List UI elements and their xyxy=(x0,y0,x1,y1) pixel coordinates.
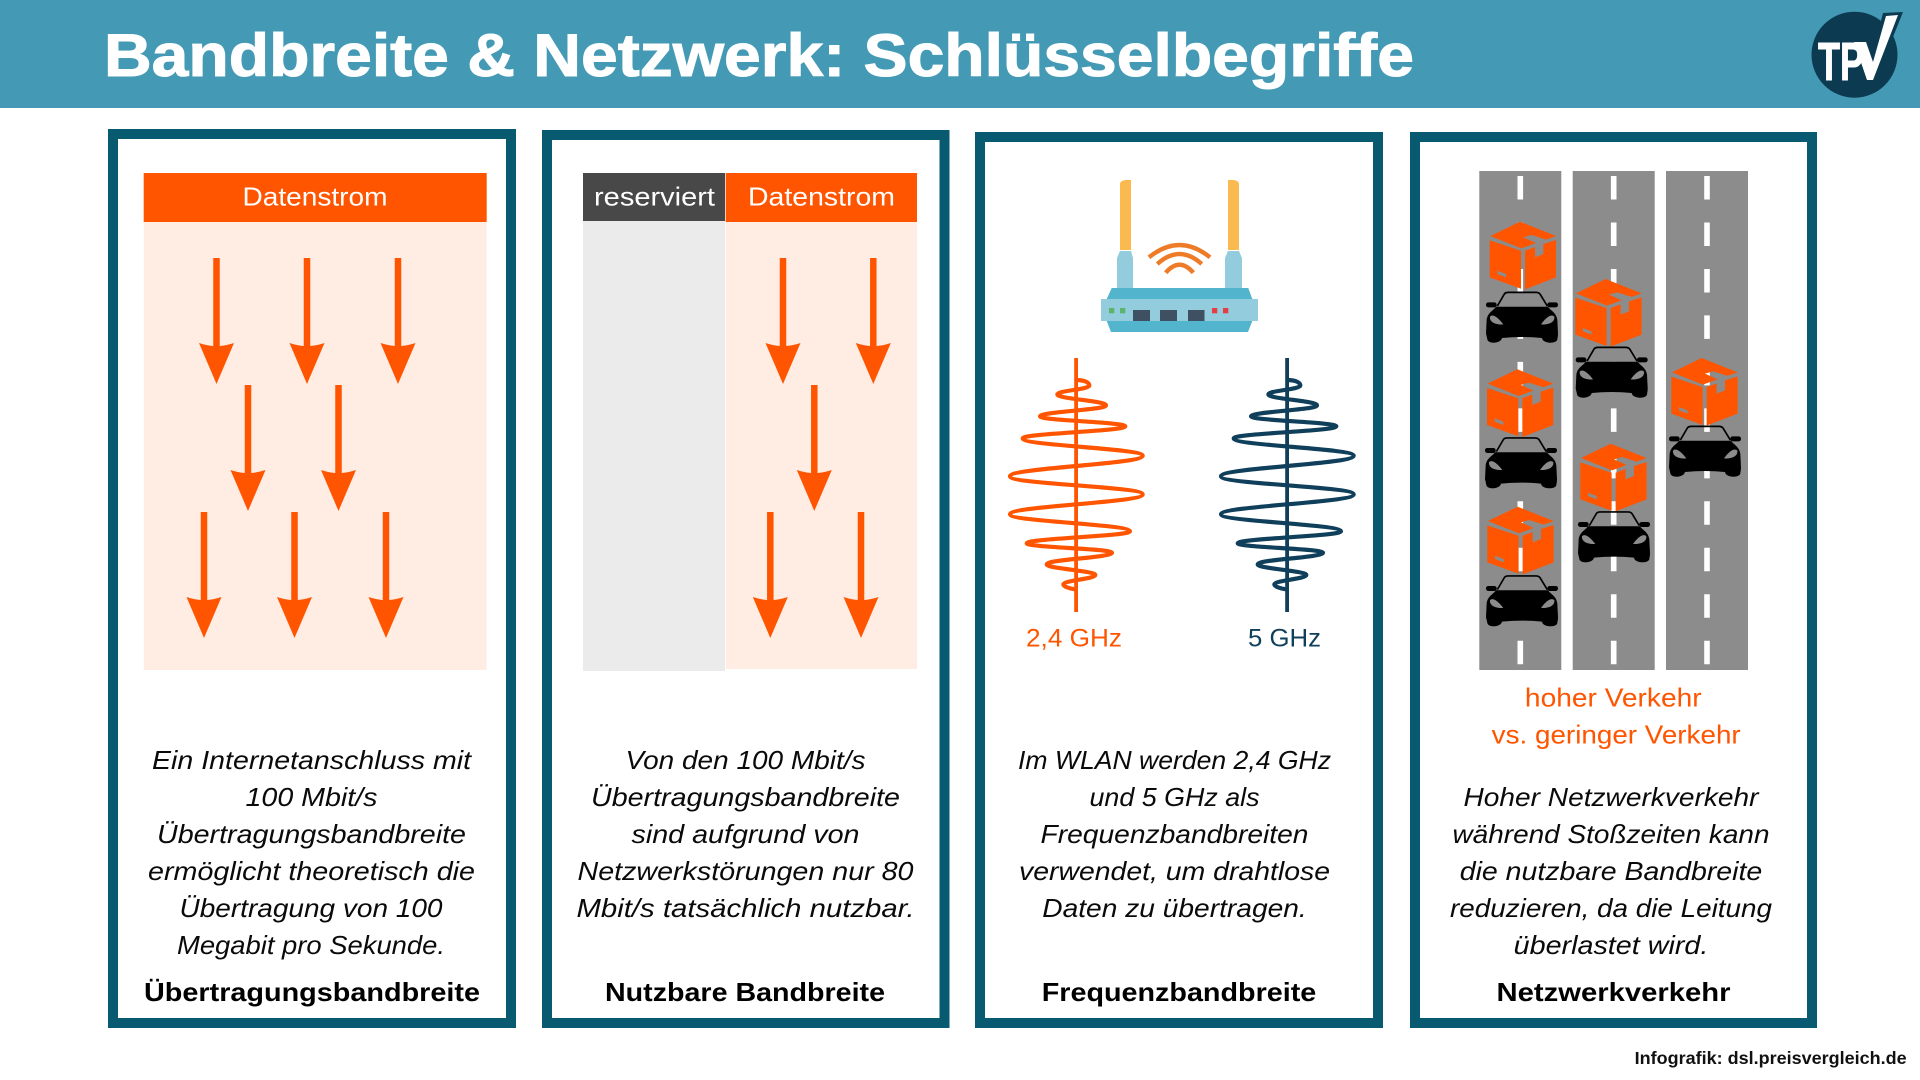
traffic caption xyxy=(1492,683,1741,749)
panel: Frequenzbandbreite xyxy=(980,137,1378,1023)
data stream area: Datenstrom xyxy=(748,182,895,212)
road 2 xyxy=(1573,171,1655,670)
description text: Übertragung von 100 xyxy=(180,893,443,923)
chart: 2,4 GHz wave xyxy=(1010,358,1143,612)
logo: TP xyxy=(1818,32,1864,92)
description text xyxy=(1450,782,1773,960)
description text: Im WLAN werden 2,4 GHz xyxy=(1018,745,1331,775)
description text: während Stoßzeiten kann xyxy=(1452,819,1770,849)
panel: Netzwerkverkehr xyxy=(1415,137,1812,1023)
label: 2,4 GHz: 2,4 GHz xyxy=(1026,625,1122,653)
traffic caption: vs. geringer Verkehr xyxy=(1492,719,1741,749)
arrows: reduced data flow xyxy=(753,258,891,638)
description text xyxy=(1018,745,1331,923)
icons: package and car, road 3 xyxy=(1669,358,1741,477)
panel heading: Übertragungsbandbreite xyxy=(144,977,480,1007)
chart: 5 GHz wave xyxy=(1221,358,1354,612)
icon: wifi router xyxy=(1101,180,1258,332)
road 1 xyxy=(1479,171,1561,670)
traffic caption: hoher Verkehr xyxy=(1525,683,1702,713)
description text: Megabit pro Sekunde. xyxy=(177,930,445,960)
description text: Ein Internetanschluss mit xyxy=(152,745,473,775)
description text: Mbit/s tatsächlich nutzbar. xyxy=(576,893,914,923)
logo xyxy=(1812,12,1903,98)
label: 5 GHz: 5 GHz xyxy=(1248,625,1321,653)
title: Bandbreite & Netzwerk: Schlüsselbegriffe xyxy=(104,22,1414,89)
description text: Hoher Netzwerkverkehr xyxy=(1464,782,1760,812)
description text: Frequenzbandbreiten xyxy=(1040,819,1308,849)
data stream header: Datenstrom xyxy=(242,182,388,212)
reserved area: reserviert xyxy=(594,182,716,212)
panel heading: Frequenzbandbreite xyxy=(1042,977,1316,1007)
panel: Übertragungsbandbreite xyxy=(113,134,511,1023)
road 3 xyxy=(1666,171,1748,670)
description text: Übertragungsbandbreite xyxy=(591,782,900,812)
panel heading: Nutzbare Bandbreite xyxy=(605,977,885,1007)
icons: packages and cars, road 1 xyxy=(1485,222,1558,626)
title banner xyxy=(0,0,1920,108)
icons: packages and cars, road 2 xyxy=(1575,279,1650,562)
description text: verwendet, um drahtlose xyxy=(1019,856,1330,886)
arrows: full data flow xyxy=(186,258,416,638)
description text: ermöglicht theoretisch die xyxy=(148,856,475,886)
data stream header xyxy=(144,173,487,222)
description text: Netzwerkstörungen nur 80 xyxy=(578,856,914,886)
reserved area xyxy=(583,173,725,671)
description text: überlastet wird. xyxy=(1514,930,1708,960)
description text: Übertragungsbandbreite xyxy=(157,819,466,849)
source credit: Infografik: dsl.preisvergleich.de xyxy=(1635,1048,1907,1068)
description text: 100 Mbit/s xyxy=(246,782,378,812)
description text: Daten zu übertragen. xyxy=(1042,893,1307,923)
description text: Von den 100 Mbit/s xyxy=(626,745,866,775)
description text xyxy=(148,745,475,960)
description text xyxy=(576,745,914,923)
description text: reduzieren, da die Leitung xyxy=(1450,893,1773,923)
description text: sind aufgrund von xyxy=(632,819,860,849)
description text: die nutzbare Bandbreite xyxy=(1460,856,1762,886)
data stream body xyxy=(144,222,487,670)
panel: Nutzbare Bandbreite xyxy=(547,135,944,1023)
data stream area xyxy=(726,173,917,669)
description text: und 5 GHz als xyxy=(1090,782,1260,812)
panel heading: Netzwerkverkehr xyxy=(1496,977,1730,1007)
